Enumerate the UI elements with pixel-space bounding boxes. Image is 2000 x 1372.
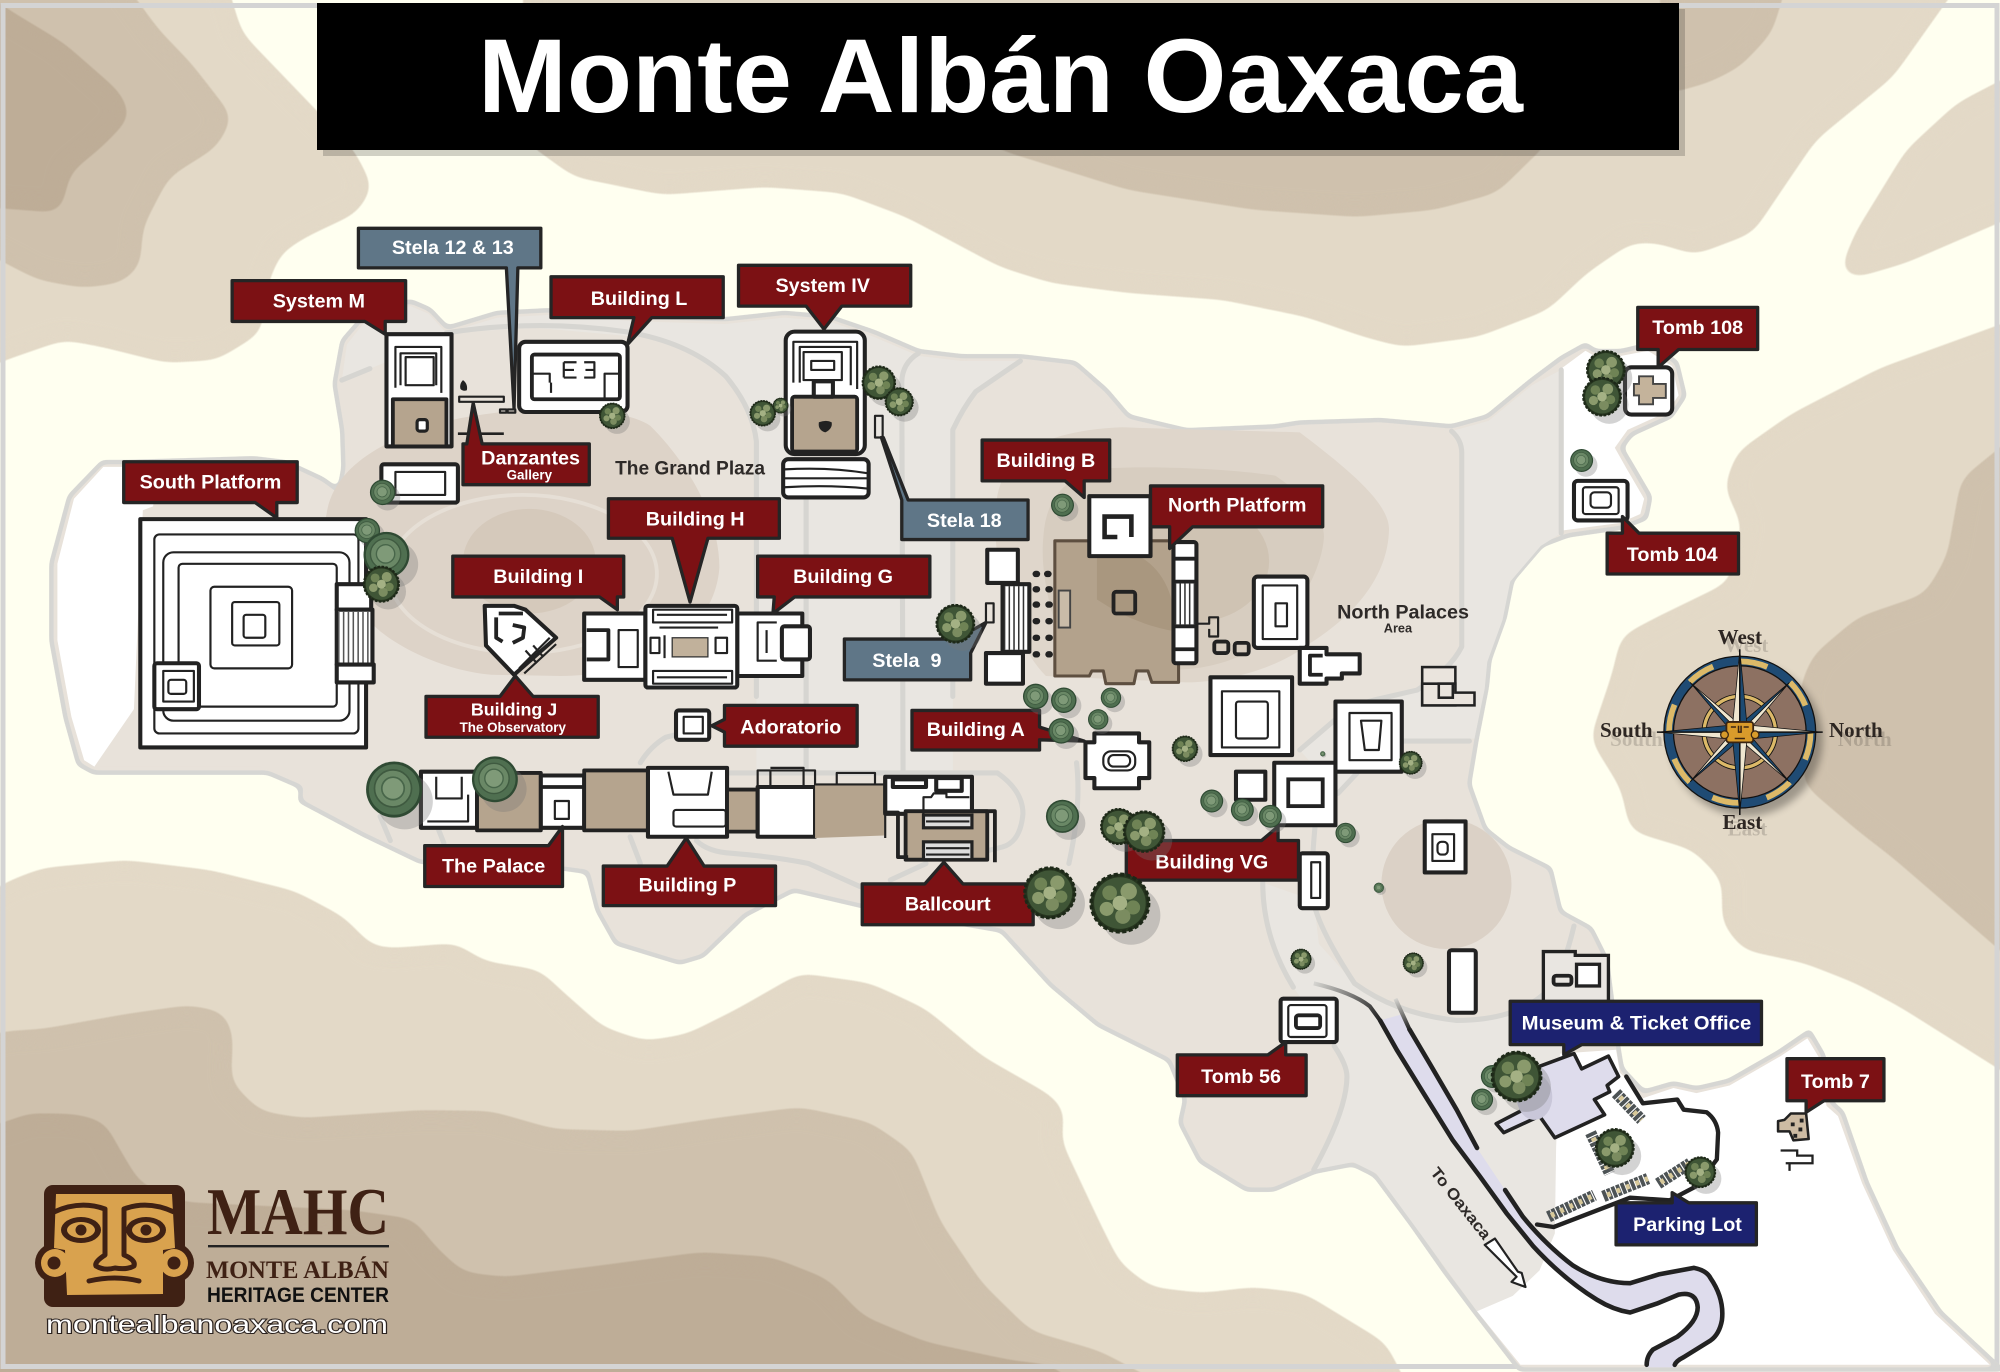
building: System IV <box>783 332 883 497</box>
label: The Palace <box>425 827 562 886</box>
label: Stela 18: Stela 18 <box>927 510 1002 532</box>
building: J The Observatory <box>485 606 556 675</box>
label: Tomb 7 <box>1787 1059 1884 1112</box>
trees <box>355 351 1721 1194</box>
label: Building L <box>551 277 723 344</box>
label: South Platform: South Platform <box>140 472 281 494</box>
compass: West <box>1718 625 1762 649</box>
label: Parking Lot <box>1616 1193 1756 1245</box>
label: Danzantes Gallery: Danzantes <box>481 447 580 469</box>
building: Tomb 7 <box>1778 1114 1812 1171</box>
arrow: To Oaxaca <box>1485 1239 1526 1287</box>
label: Tomb 56 <box>1177 1042 1306 1096</box>
text: North Palaces Area <box>1337 602 1469 636</box>
compass: East <box>1728 816 1767 840</box>
text: The Grand Plaza: The Grand Plaza <box>615 458 765 479</box>
label: Building VG: Building VG <box>1155 852 1268 874</box>
building: North Platform <box>1055 541 1249 684</box>
label: Tomb 104 <box>1607 517 1739 574</box>
label: Museum & Ticket Office <box>1510 1001 1761 1055</box>
north platform mound contours <box>995 427 1389 682</box>
building: Tomb 104 <box>1574 481 1628 520</box>
compass: East <box>1722 810 1762 834</box>
label: Building P <box>603 838 776 906</box>
label: Tomb 7: Tomb 7 <box>1801 1071 1870 1093</box>
logo face <box>35 1185 194 1307</box>
building: South Platform <box>140 519 374 747</box>
label: Tomb 108 <box>1638 307 1758 367</box>
compass <box>1600 625 1892 840</box>
site paths <box>342 326 1574 1170</box>
site ground <box>54 304 1996 1367</box>
title banner: Monte Albán Oaxaca <box>478 18 1525 135</box>
building: Tomb 56 <box>1281 999 1337 1042</box>
buildings: The Palace and Building P row <box>421 768 885 838</box>
label: North Platform <box>1151 486 1323 548</box>
building: I <box>584 614 645 680</box>
parking lot <box>1537 1077 1718 1227</box>
compass: South <box>1600 718 1653 742</box>
label: Ballcourt: Ballcourt <box>905 894 991 916</box>
label: Building H: Building H <box>646 509 745 531</box>
label: The Palace: The Palace <box>442 855 545 877</box>
logo: MAHC: MONTE ALBÁN <box>206 1256 389 1284</box>
label: Building P: Building P <box>639 875 736 897</box>
label: Building VG <box>1126 827 1298 880</box>
building: H <box>645 606 737 687</box>
label: Parking Lot: Parking Lot <box>1633 1214 1742 1236</box>
building: G <box>737 614 810 676</box>
label: Stela 18 <box>881 437 1028 540</box>
label: Stela 12 & 13 <box>358 228 541 408</box>
east mound <box>1381 819 1511 949</box>
label: Stela 9: Stela 9 <box>872 650 942 672</box>
label: Building B: Building B <box>997 450 1095 472</box>
compass: North <box>1838 727 1892 751</box>
road to Oaxaca <box>1314 983 1722 1367</box>
compass: South <box>1610 727 1663 751</box>
label: Tomb 104: Tomb 104 <box>1627 544 1718 566</box>
logo: MAHC: MAHC <box>207 1175 389 1249</box>
label: Tomb 108: Tomb 108 <box>1652 317 1743 339</box>
label: Stela 9 <box>844 622 986 680</box>
building: System M <box>381 334 515 503</box>
building: Museum <box>1496 1054 1619 1138</box>
label: Ballcourt <box>862 862 1033 925</box>
label: Adoratorio <box>712 705 857 746</box>
title banner <box>317 3 1685 156</box>
label: Building J The Observatory: Building J <box>471 700 557 720</box>
compass: West <box>1724 633 1768 657</box>
building: Tomb 108 <box>1625 367 1672 415</box>
label: Building G <box>758 556 930 614</box>
text: North Palaces Area: North Palaces <box>1337 602 1469 624</box>
label: Museum & Ticket Office: Museum & Ticket Office <box>1522 1012 1751 1034</box>
compass: North <box>1829 718 1883 742</box>
label: Building J The Observatory: The Observatory <box>460 720 566 735</box>
label: Building B <box>982 440 1110 497</box>
logo: MAHC: HERITAGE CENTER <box>207 1284 389 1307</box>
building: B <box>1089 496 1151 556</box>
label: South Platform <box>124 462 297 518</box>
building: west of North Platform <box>986 550 1050 684</box>
label: System M <box>232 281 406 334</box>
label: Stela 12 & 13: Stela 12 & 13 <box>392 237 514 259</box>
label: System M: System M <box>273 290 365 312</box>
label: Building A: Building A <box>927 719 1025 741</box>
label: Building H <box>608 499 779 602</box>
label: Building L: Building L <box>591 288 687 310</box>
building: L <box>519 342 628 412</box>
label: Tomb 56: Tomb 56 <box>1201 1066 1281 1088</box>
logo: MAHC: montealbanoaxaca.com <box>46 1311 388 1339</box>
label: System IV: System IV <box>775 275 871 297</box>
label: Danzantes Gallery <box>463 403 589 485</box>
label: Danzantes Gallery: Gallery <box>507 468 553 483</box>
label: Building G: Building G <box>793 566 893 588</box>
label: Adoratorio: Adoratorio <box>740 716 841 738</box>
text: To Oaxaca: To Oaxaca <box>1427 1165 1494 1243</box>
label: North Platform: North Platform <box>1168 494 1306 516</box>
building: Adoratorio <box>676 710 709 740</box>
label: Building I <box>453 556 624 610</box>
label: Building I: Building I <box>493 566 583 588</box>
label: System IV <box>739 265 911 329</box>
text: North Palaces Area: Area <box>1384 621 1413 636</box>
plaza mound contours <box>325 409 719 676</box>
logo: MAHC <box>35 1175 389 1339</box>
label: Building A <box>912 710 1084 750</box>
label: Building J The Observatory <box>426 676 598 737</box>
building: A <box>1085 733 1149 788</box>
building: Ballcourt <box>885 777 995 862</box>
buildings: North Palaces <box>1210 577 1608 1013</box>
